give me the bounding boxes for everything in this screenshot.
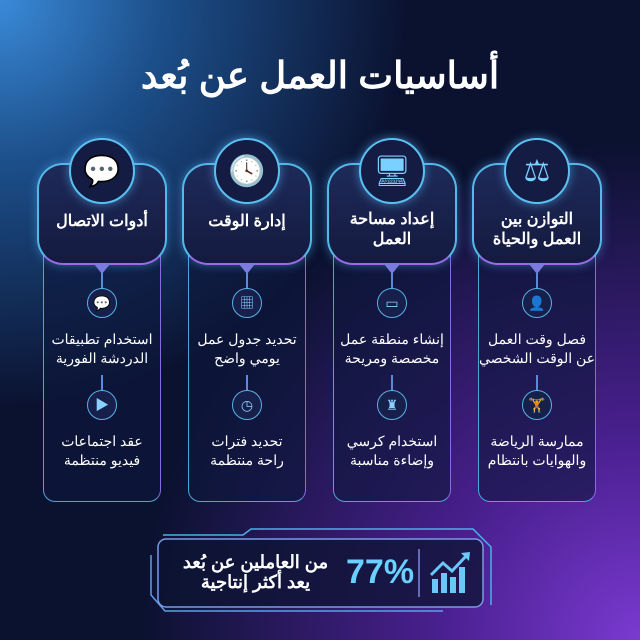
text: breaks: راحة منتظمة <box>210 452 284 468</box>
icon: video <box>87 390 117 420</box>
text: breaks: تحديد فترات <box>211 433 283 449</box>
icon: calendar <box>232 288 262 318</box>
icon: desk small <box>377 288 407 318</box>
text: sports: والهوايات بانتظام <box>488 452 586 468</box>
panel: work-life balance <box>466 132 608 502</box>
stat text <box>183 552 328 593</box>
heading: التوازن بين <box>501 211 573 228</box>
text: separate time: عن الوقت الشخصي <box>479 350 595 366</box>
icon: video: ▶ <box>95 397 109 413</box>
icon: chair <box>377 390 407 420</box>
text: chair lighting: وإضاءة مناسبة <box>350 452 434 468</box>
heading <box>350 211 434 248</box>
icon: clock small <box>232 390 262 420</box>
text: chair lighting: استخدام كرسي <box>347 433 437 449</box>
icon: clock small: ◷ <box>241 396 253 412</box>
text: chat apps <box>51 331 153 366</box>
icon: scales: ⚖ <box>524 154 550 188</box>
text: chair lighting <box>347 433 437 468</box>
icon: desk: 🖥 <box>373 154 411 188</box>
icon: growth chart <box>430 552 470 593</box>
text: schedule: يومي واضح <box>214 350 280 366</box>
text: separate time <box>479 331 595 366</box>
stat text: يعد أكثر إنتاجية <box>201 572 310 592</box>
text: schedule: تحديد جدول عمل <box>197 331 297 347</box>
heading <box>493 211 581 248</box>
icon: dumbbell: 🏋 <box>528 396 546 412</box>
icon: chat <box>69 138 135 204</box>
stat text: من العاملين عن بُعد <box>183 552 328 572</box>
text: dedicated area: مخصصة ومريحة <box>345 350 439 366</box>
callout: statistic banner <box>150 528 492 612</box>
text: video meetings: عقد اجتماعات <box>61 433 143 449</box>
text: chat apps: استخدام تطبيقات <box>51 331 153 347</box>
heading: العمل <box>373 231 411 248</box>
panel: time management <box>176 132 318 502</box>
panel: communication tools <box>32 133 172 502</box>
stat number: 77% <box>346 553 414 591</box>
text: dedicated area <box>340 331 444 366</box>
text: video meetings: فيديو منتظمة <box>64 452 140 468</box>
icon: scales <box>504 138 570 204</box>
text: sports: ممارسة الرياضة <box>490 433 584 449</box>
text: separate time: فصل وقت العمل <box>488 331 586 347</box>
icon: chat: 💬 <box>83 154 121 188</box>
icon: person <box>522 288 552 318</box>
text: schedule <box>197 331 297 366</box>
icon: desk <box>359 138 425 204</box>
title: أساسيات العمل عن بُعد <box>141 55 499 96</box>
heading: أدوات الاتصال <box>56 213 148 230</box>
text: chat apps: الدردشة الفورية <box>56 350 148 366</box>
icon: calendar: ▦ <box>240 295 254 311</box>
text: sports <box>488 433 586 468</box>
text: dedicated area: إنشاء منطقة عمل <box>340 331 444 347</box>
icon: chat small <box>87 288 117 318</box>
icon: clock: 🕓 <box>228 154 266 188</box>
heading: إدارة الوقت <box>208 213 286 230</box>
icon: person: 👤 <box>528 294 546 310</box>
panel: workspace <box>320 132 464 502</box>
icon: clock <box>214 138 280 204</box>
text: video meetings <box>61 433 143 468</box>
heading: العمل والحياة <box>493 231 581 248</box>
icon: desk small: ▭ <box>385 294 399 310</box>
text: breaks <box>210 433 284 468</box>
icon: chair: ♜ <box>386 396 398 412</box>
icon: chat small: 💬 <box>93 294 111 310</box>
icon: dumbbell <box>522 390 552 420</box>
heading: إعداد مساحة <box>350 211 434 228</box>
